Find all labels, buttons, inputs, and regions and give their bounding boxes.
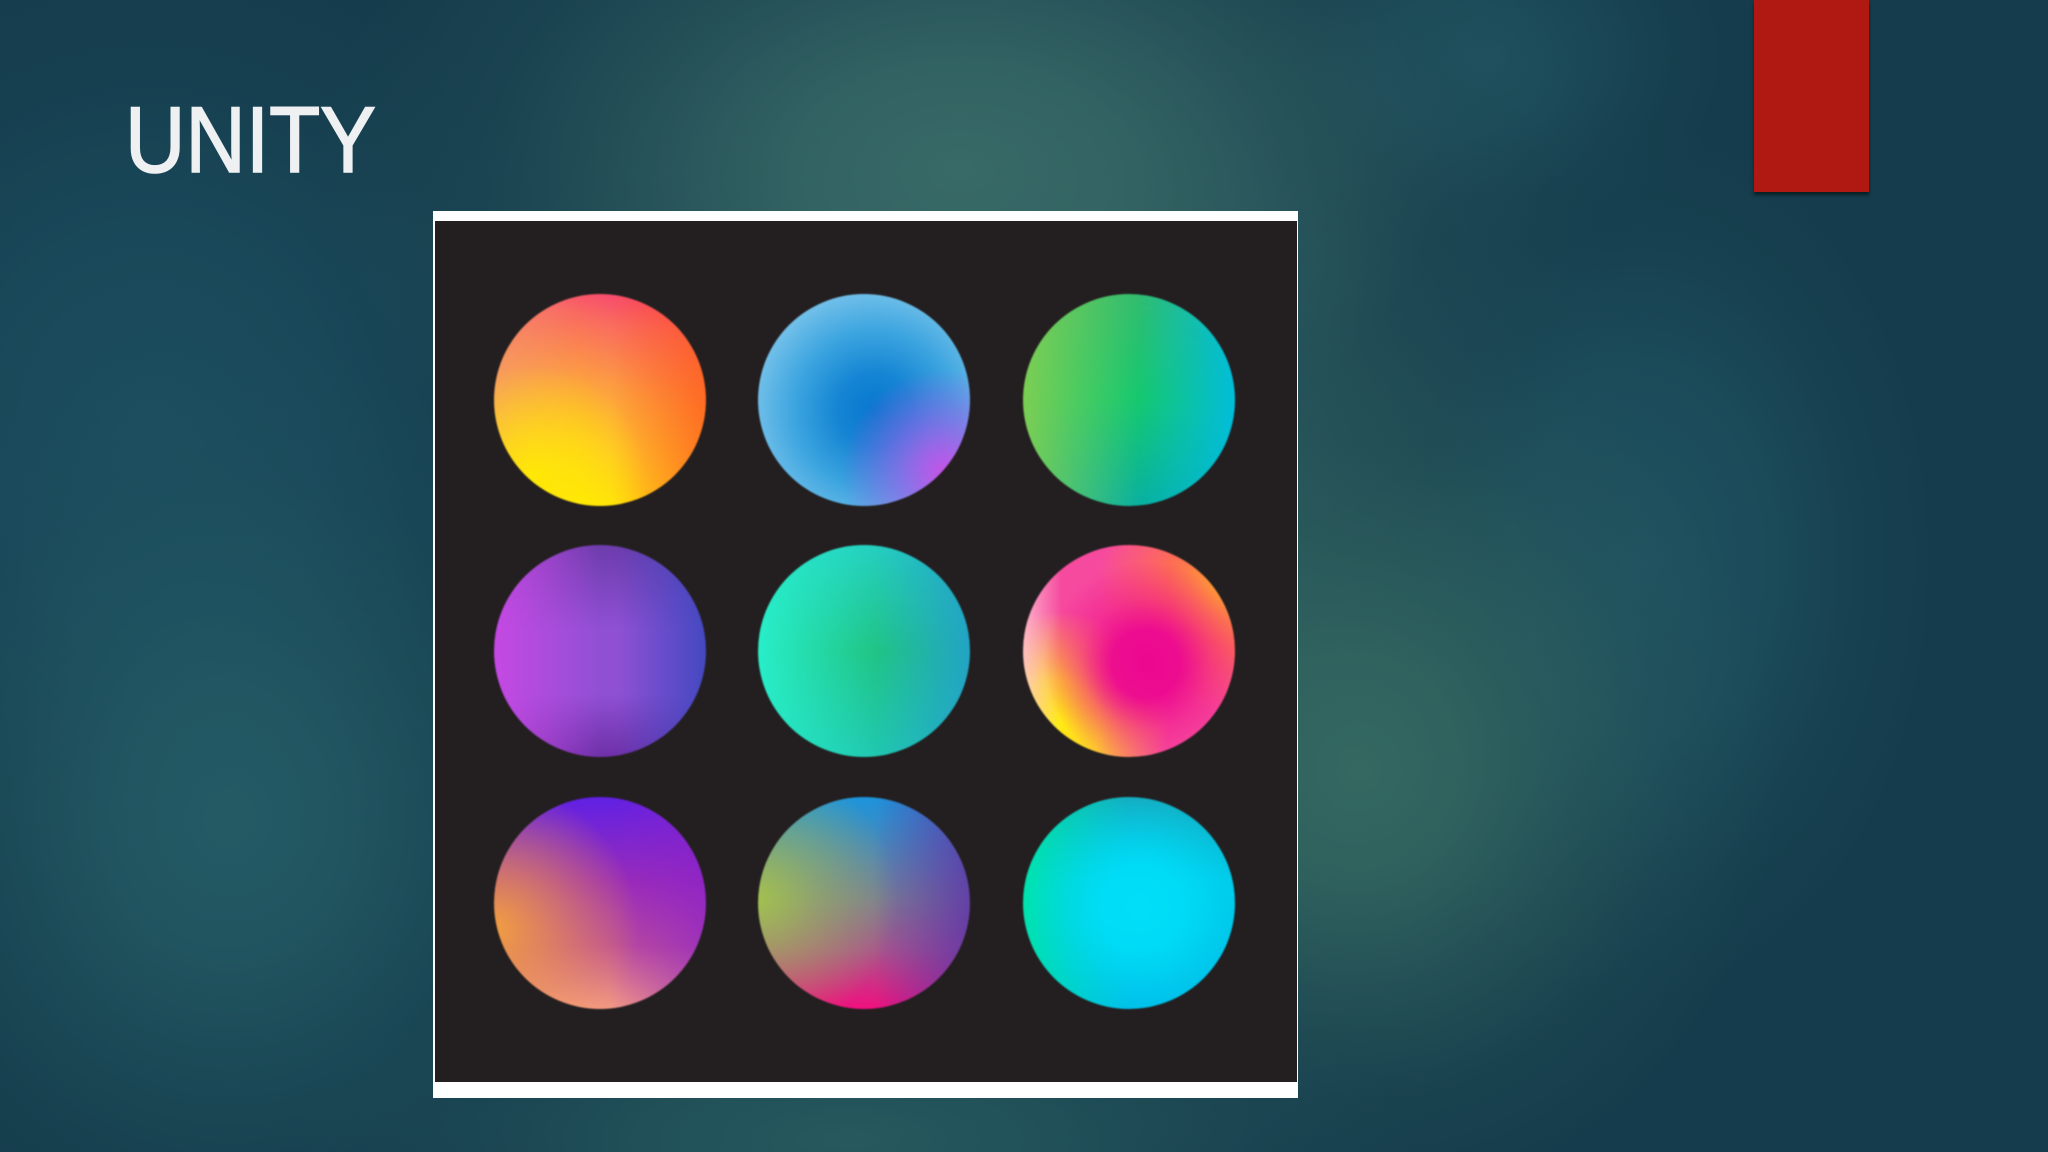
- sphere: magenta: [1023, 545, 1235, 757]
- sphere: teal: [758, 545, 970, 757]
- dark image panel: [435, 221, 1297, 1082]
- sphere: pink orange yellow: [494, 294, 706, 506]
- sphere: blue olive pink: [758, 797, 970, 1009]
- sphere: cyan: [1023, 797, 1235, 1009]
- sphere: purple: [494, 545, 706, 757]
- sphere: green: [1023, 294, 1235, 506]
- picture: grid of nine gradient spheres: [433, 211, 1298, 1098]
- title: UNITY: [125, 87, 376, 192]
- sphere: blue: [758, 294, 970, 506]
- red accent tab: [1754, 0, 1869, 192]
- sphere: violet peach: [494, 797, 706, 1009]
